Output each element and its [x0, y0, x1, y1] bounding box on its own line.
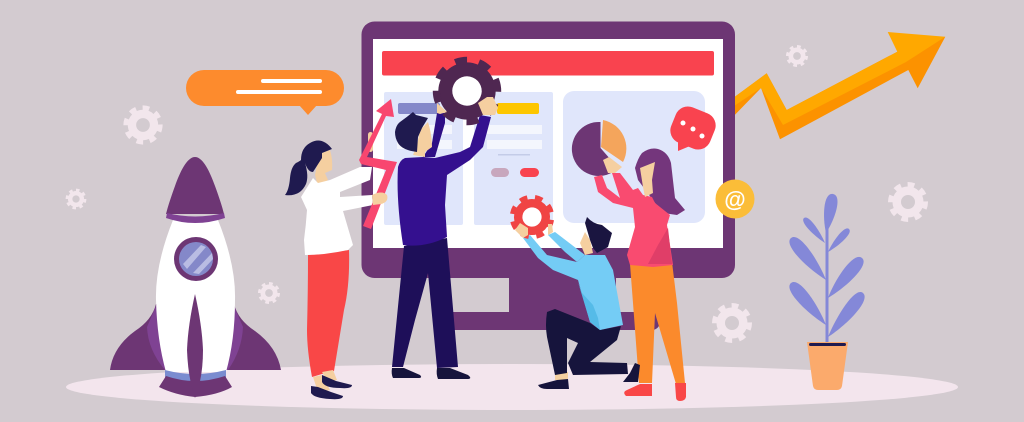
face and neck: [640, 162, 655, 197]
icon: at sign badge: [716, 180, 754, 218]
torso shadow: [578, 282, 600, 330]
hand: woman lower hand: [372, 192, 387, 205]
hands on dark gear: [437, 97, 498, 115]
shoes: [311, 375, 352, 399]
red shoes: [624, 383, 686, 401]
rocket body: [156, 220, 235, 372]
rocket fin strips: [147, 306, 243, 370]
plant soil: [809, 343, 846, 346]
orange trousers: [630, 262, 685, 384]
hair back: [635, 148, 685, 215]
arrow: red zigzag: [359, 99, 397, 229]
white shirt: [301, 167, 373, 255]
icon: dark gear: [428, 52, 506, 130]
left panel: [384, 92, 463, 225]
torso and front arm: [523, 235, 623, 330]
icon: pale gear left large: [126, 108, 160, 142]
pink top and arms: [594, 173, 673, 267]
middle panel: [474, 92, 553, 225]
ankles: [313, 370, 337, 392]
hand behind arrow: [368, 132, 373, 152]
hands on red gear: [515, 223, 553, 238]
rocket nozzle: [165, 370, 226, 384]
plant stem: [826, 228, 828, 344]
rocket center fin: [187, 294, 203, 398]
trousers: [392, 238, 458, 368]
plant: [789, 194, 865, 390]
icon: pale gear top right: [787, 46, 807, 66]
hair: [285, 141, 332, 195]
speech bubble: orange: [186, 70, 344, 115]
right panel: [563, 91, 705, 223]
icon: pale gear near rocket: [259, 283, 279, 303]
monitor screen: [373, 39, 723, 248]
plant pot: [807, 342, 848, 390]
icon: pale gear below monitor: [714, 306, 750, 340]
floor ellipse: [66, 364, 958, 410]
top shadow: [648, 228, 672, 264]
monitor stand: [509, 270, 616, 315]
person: man in purple sweater lifting gear: [392, 112, 491, 379]
sweater: [398, 115, 491, 246]
neck and face: [413, 122, 432, 157]
person: woman in pink: [594, 148, 686, 401]
plant leaves: [789, 194, 865, 337]
icon: pale gear left small: [67, 190, 85, 208]
neck and face: [315, 150, 332, 183]
rocket nose band: [166, 213, 225, 223]
header bar: [382, 51, 714, 76]
icon: pale gear right: [890, 184, 926, 220]
rocket: [110, 157, 281, 398]
shoes: [538, 363, 640, 389]
monitor frame: [362, 22, 735, 278]
hands: [603, 157, 622, 173]
dark trousers: [546, 309, 628, 375]
face: [580, 232, 593, 255]
icon: at sign badge: @: [724, 187, 746, 212]
arrow: rising orange trend: [725, 32, 945, 139]
person: kneeling man in blue: [523, 217, 640, 389]
monitor: [362, 22, 735, 330]
rocket nose: [166, 157, 224, 214]
person: woman in white holding arrow: [285, 132, 373, 399]
back arm: [548, 232, 585, 262]
pie chart: [572, 120, 626, 176]
red trousers: [307, 250, 349, 377]
rocket window: [174, 237, 218, 281]
rocket fins: [110, 304, 281, 370]
icon: red chat bubble: [666, 103, 720, 153]
shoes: [392, 368, 470, 379]
monitor base: [434, 312, 660, 330]
hair: [395, 112, 428, 152]
ankle: [555, 372, 568, 380]
hair: [585, 217, 612, 253]
icon: red gear: [509, 194, 555, 240]
back arm: [423, 113, 445, 157]
